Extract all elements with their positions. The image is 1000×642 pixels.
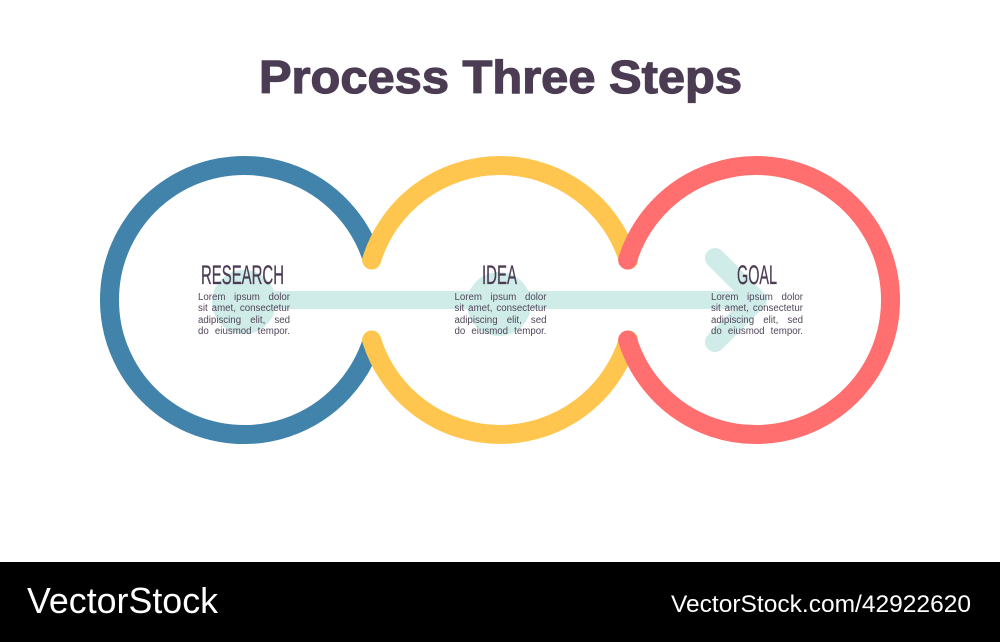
ring: goal (red) — [628, 165, 891, 434]
text block: idea: adipiscing elit, sed — [454, 315, 546, 326]
ring: idea (yellow) — [372, 166, 628, 434]
text block: research — [198, 292, 290, 337]
text block: idea: Lorem ipsum dolor — [454, 292, 546, 303]
text block: goal — [711, 292, 803, 337]
text block: idea: do eiusmod tempor. — [454, 326, 546, 337]
text block: goal: sit amet, consectetur — [711, 303, 803, 314]
text block: research: adipiscing elit, sed — [198, 315, 290, 326]
text block: research: sit amet, consectetur — [198, 303, 290, 314]
text block: idea — [454, 292, 546, 337]
text block: idea: sit amet, consectetur — [454, 303, 546, 314]
heading: idea: IDEA — [482, 260, 517, 290]
title: Process Three Steps — [259, 51, 742, 103]
heading: research: RESEARCH — [201, 260, 284, 290]
arrow: teal path through steps — [212, 258, 757, 342]
ring: research (blue) — [109, 165, 372, 435]
text block: goal: Lorem ipsum dolor — [711, 292, 803, 303]
footer band — [0, 562, 1000, 642]
text block: research: Lorem ipsum dolor — [198, 292, 290, 303]
heading: goal: GOAL — [737, 260, 777, 290]
footer logo: VectorStock — [27, 580, 219, 621]
text block: research: do eiusmod tempor. — [198, 326, 290, 337]
text block: goal: do eiusmod tempor. — [711, 326, 803, 337]
text block: goal: adipiscing elit, sed — [711, 315, 803, 326]
footer url: VectorStock.com/42922620 — [671, 591, 971, 618]
